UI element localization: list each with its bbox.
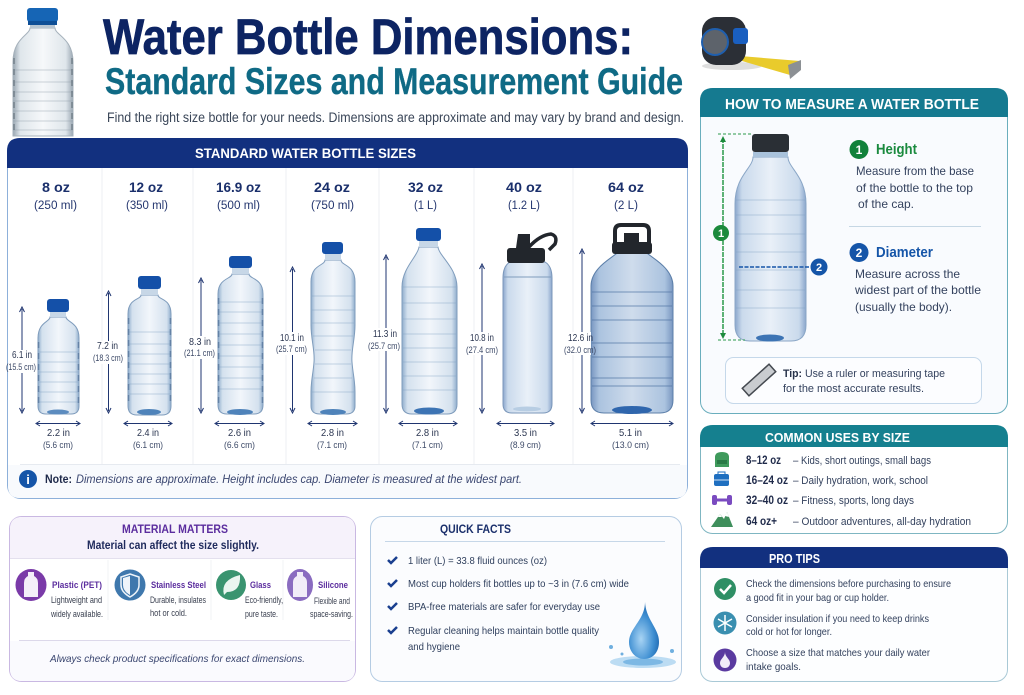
step: height: 1 bbox=[856, 143, 863, 157]
material: glass: Eco-friendly, bbox=[245, 595, 283, 605]
row: 64 oz+: 64 oz+ bbox=[746, 516, 777, 528]
quick facts heading: QUICK FACTS bbox=[440, 524, 511, 536]
diagram: measured bottle bbox=[713, 134, 828, 342]
column: 8 oz bbox=[6, 179, 80, 451]
subtitle text: Find the right size bottle for your needs. Dimensions are approximate and may vary by brand and design. bbox=[107, 110, 684, 125]
material: silicone bbox=[287, 569, 353, 619]
column: 32 oz: (1 L) bbox=[414, 200, 437, 212]
column: 64 oz: (13.0 cm) bbox=[612, 440, 649, 451]
material: stainless steel: Durable, insulates bbox=[150, 595, 206, 605]
column: 64 oz: 12.6 in bbox=[568, 332, 593, 344]
material: stainless steel: hot or cold. bbox=[150, 608, 187, 618]
panel: how to measure bbox=[700, 88, 1008, 414]
row: 32-40 oz bbox=[712, 495, 914, 507]
step: diameter bbox=[850, 243, 981, 314]
column: 32 oz: (7.1 cm) bbox=[412, 440, 443, 451]
tip: check dimensions: Check the dimensions before purchasing to ensure bbox=[746, 578, 951, 590]
row: 8-12 oz bbox=[715, 452, 931, 467]
step: diameter: 2 bbox=[856, 246, 863, 260]
panel: common uses by size bbox=[700, 425, 1008, 534]
diagram: measured bottle: 1 bbox=[718, 228, 724, 240]
column: 40 oz: (27.4 cm) bbox=[466, 345, 498, 356]
note: Note: bbox=[45, 472, 72, 486]
column: 40 oz: 10.8 in bbox=[470, 332, 494, 344]
material: stainless steel: Stainless Steel bbox=[151, 580, 206, 590]
step: height bbox=[850, 140, 974, 211]
fact list: Most cup holders fit bottles up to ~3 in (7.6 cm) wide bbox=[408, 578, 629, 590]
tip: insulation bbox=[714, 612, 929, 638]
column: 12 oz: (6.1 cm) bbox=[133, 440, 163, 451]
material: plastic: Lightweight and bbox=[51, 595, 102, 605]
column: 8 oz: 2.2 in bbox=[47, 427, 70, 439]
fact list: and hygiene bbox=[408, 641, 460, 653]
icon: tape measure bbox=[702, 17, 801, 79]
column: 64 oz: (2 L) bbox=[614, 200, 638, 212]
tip: check dimensions bbox=[714, 578, 951, 604]
row: 16-24 oz: 16–24 oz bbox=[746, 475, 788, 487]
material: silicone: Flexible and bbox=[314, 596, 350, 606]
material subheading: Material can affect the size slightly. bbox=[87, 538, 259, 552]
tip: check dimensions: a good fit in your bag or cup holder. bbox=[746, 592, 889, 604]
fact list: BPA-free materials are safer for everyday use bbox=[408, 601, 600, 613]
step: height: of the cap. bbox=[858, 197, 914, 211]
column: 16.9 oz bbox=[183, 179, 264, 451]
column: 64 oz bbox=[563, 179, 673, 451]
material: silicone: space-saving. bbox=[310, 609, 353, 619]
column: 32 oz bbox=[367, 179, 457, 451]
column: 16.9 oz: (6.6 cm) bbox=[224, 440, 255, 451]
tip: daily intake: intake goals. bbox=[746, 661, 801, 673]
fact list: Regular cleaning helps maintain bottle quality bbox=[408, 625, 600, 637]
note: Dimensions are approximate. Height includes cap. Diameter is measured at the widest part. bbox=[76, 472, 522, 486]
step: height: Height bbox=[876, 142, 917, 158]
row: 8-12 oz: 8–12 oz bbox=[746, 455, 781, 467]
column: 8 oz: 8 oz bbox=[42, 179, 70, 195]
note bbox=[19, 470, 522, 488]
panel: quick facts bbox=[370, 516, 682, 682]
material: plastic: Plastic (PET) bbox=[52, 580, 102, 590]
step: diameter: Measure across the bbox=[855, 267, 960, 281]
material: glass: pure taste. bbox=[245, 609, 278, 619]
tip: daily intake bbox=[714, 647, 930, 673]
row: 64 oz+ bbox=[711, 512, 971, 528]
material heading: MATERIAL MATTERS bbox=[122, 524, 228, 536]
panel: standard water bottle sizes bbox=[6, 138, 688, 498]
column: 24 oz: 2.8 in bbox=[321, 427, 344, 439]
row: 16-24 oz bbox=[714, 472, 928, 487]
column: 40 oz: (1.2 L) bbox=[508, 200, 540, 212]
column: 24 oz: (25.7 cm) bbox=[276, 344, 307, 355]
material: glass: Glass bbox=[250, 580, 271, 590]
column: 8 oz: 6.1 in bbox=[12, 349, 32, 361]
column: 12 oz: (350 ml) bbox=[126, 200, 168, 212]
column: 40 oz: (8.9 cm) bbox=[510, 440, 541, 451]
panel heading: STANDARD WATER BOTTLE SIZES bbox=[195, 145, 416, 161]
column: 32 oz: (25.7 cm) bbox=[368, 341, 400, 352]
tip box: Use a ruler or measuring tape bbox=[805, 368, 945, 380]
column: 8 oz: (15.5 cm) bbox=[6, 362, 36, 373]
fact list bbox=[388, 555, 629, 653]
column: 64 oz: 5.1 in bbox=[619, 427, 642, 439]
column: 24 oz: 10.1 in bbox=[280, 332, 304, 344]
common uses heading: COMMON USES BY SIZE bbox=[765, 430, 910, 445]
step: diameter: Diameter bbox=[876, 245, 933, 261]
column: 16.9 oz: (500 ml) bbox=[217, 200, 260, 212]
material: plastic bbox=[16, 569, 103, 619]
tip box bbox=[726, 358, 982, 404]
column: 16.9 oz: 8.3 in bbox=[189, 336, 211, 348]
material: stainless steel bbox=[114, 570, 206, 618]
title: Water Bottle Dimensions: bbox=[103, 9, 633, 65]
column: 16.9 oz: (21.1 cm) bbox=[184, 348, 215, 359]
icon: water drop bbox=[609, 602, 676, 668]
column: 8 oz: (5.6 cm) bbox=[43, 440, 73, 451]
pro tips heading: PRO TIPS bbox=[769, 552, 820, 566]
title: Standard Sizes and Measurement Guide bbox=[105, 61, 683, 102]
column: 16.9 oz: 16.9 oz bbox=[216, 179, 261, 195]
column: 64 oz: (32.0 cm) bbox=[564, 345, 596, 356]
tip: insulation: cold or hot for longer. bbox=[746, 626, 832, 638]
column: 24 oz: (7.1 cm) bbox=[317, 440, 347, 451]
note: i bbox=[26, 472, 30, 487]
tip: insulation: Consider insulation if you need to keep drinks bbox=[746, 613, 929, 625]
column: 24 oz bbox=[275, 179, 357, 451]
title bbox=[103, 9, 683, 102]
column: 32 oz: 11.3 in bbox=[373, 328, 397, 340]
column: 16.9 oz: 2.6 in bbox=[228, 427, 251, 439]
tip box: Tip: bbox=[783, 368, 802, 380]
material: glass bbox=[216, 570, 283, 619]
step: diameter: widest part of the bottle bbox=[854, 283, 981, 297]
column: 12 oz: (18.3 cm) bbox=[93, 353, 123, 364]
column: 40 oz: 40 oz bbox=[506, 179, 542, 195]
how to measure heading: HOW TO MEASURE A WATER BOTTLE bbox=[725, 97, 979, 113]
diagram: measured bottle: 2 bbox=[816, 262, 822, 274]
fact list: 1 liter (L) = 33.8 fluid ounces (oz) bbox=[408, 555, 547, 567]
row: 8-12 oz: – Kids, short outings, small bags bbox=[793, 455, 931, 467]
column: 40 oz: 3.5 in bbox=[514, 427, 537, 439]
column: 40 oz bbox=[465, 179, 556, 451]
step: height: of the bottle to the top bbox=[856, 181, 973, 195]
material footnote: Always check product specifications for exact dimensions. bbox=[49, 653, 305, 665]
step: height: Measure from the base bbox=[856, 164, 974, 178]
material: plastic: widely available. bbox=[50, 609, 103, 619]
panel: pro tips bbox=[700, 547, 1008, 682]
row: 64 oz+: – Outdoor adventures, all-day hydration bbox=[793, 516, 971, 528]
column: 12 oz: 7.2 in bbox=[97, 340, 118, 352]
icon: hero water bottle bbox=[13, 8, 73, 136]
column: 12 oz: 12 oz bbox=[129, 179, 163, 195]
column: 32 oz: 32 oz bbox=[408, 179, 443, 195]
column: 8 oz: (250 ml) bbox=[34, 200, 77, 212]
column: 64 oz: 64 oz bbox=[608, 179, 644, 195]
row: 32-40 oz: – Fitness, sports, long days bbox=[793, 495, 914, 507]
column: 12 oz: 2.4 in bbox=[137, 427, 159, 439]
column: 24 oz: 24 oz bbox=[314, 179, 350, 195]
material: silicone: Silicone bbox=[318, 580, 348, 590]
column: 12 oz bbox=[92, 179, 172, 451]
step: diameter: (usually the body). bbox=[855, 300, 952, 314]
column: 32 oz: 2.8 in bbox=[416, 427, 439, 439]
tip box: for the most accurate results. bbox=[783, 383, 924, 395]
row: 32-40 oz: 32–40 oz bbox=[746, 495, 788, 507]
tip: daily intake: Choose a size that matches your daily water bbox=[746, 647, 930, 659]
column: 24 oz: (750 ml) bbox=[311, 200, 354, 212]
panel: material matters bbox=[10, 516, 356, 682]
row: 16-24 oz: – Daily hydration, work, school bbox=[793, 475, 928, 487]
